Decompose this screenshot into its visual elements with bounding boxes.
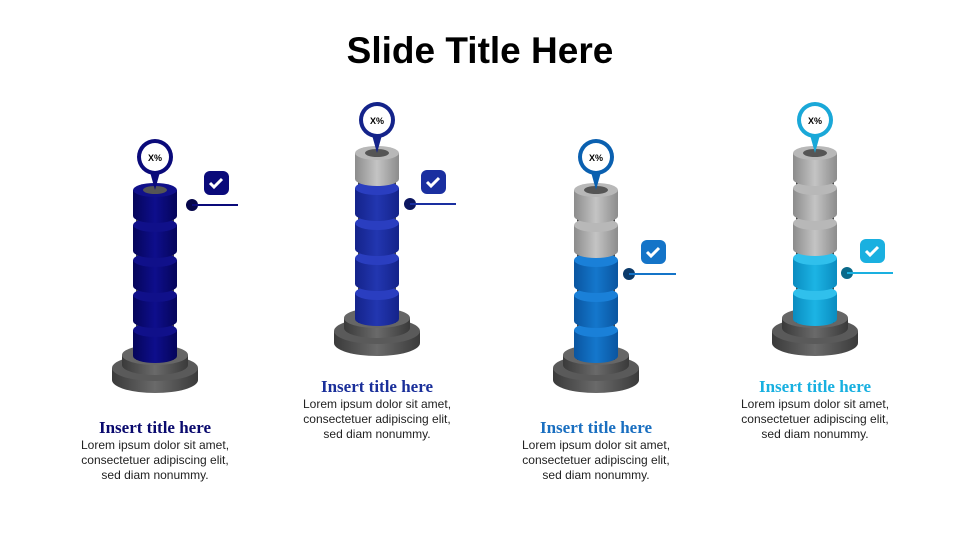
text block 3 bbox=[522, 418, 670, 482]
text block 1: Lorem ipsum dolor sit amet, bbox=[81, 438, 229, 452]
text block 3: consectetuer adipiscing elit, bbox=[522, 453, 670, 467]
text block 2: Lorem ipsum dolor sit amet, bbox=[303, 397, 451, 411]
text block 1: consectetuer adipiscing elit, bbox=[81, 453, 229, 467]
text block 3: Insert title here bbox=[540, 418, 652, 437]
check callout 1 bbox=[186, 171, 238, 211]
text block 1: Insert title here bbox=[99, 418, 211, 437]
text block 2 bbox=[303, 377, 451, 441]
text block 4: sed diam nonummy. bbox=[761, 427, 869, 441]
check callout 4 bbox=[841, 239, 893, 279]
tower 2 bbox=[334, 102, 420, 356]
pin 4 bbox=[797, 102, 833, 153]
check callout 3 bbox=[623, 240, 676, 280]
pin 2: X% bbox=[370, 116, 384, 126]
pin 1 bbox=[137, 139, 173, 190]
text block 4: consectetuer adipiscing elit, bbox=[741, 412, 889, 426]
title: Slide Title Here bbox=[347, 30, 613, 71]
pin 4: X% bbox=[808, 116, 822, 126]
text block 2: sed diam nonummy. bbox=[323, 427, 431, 441]
pin 1: X% bbox=[148, 153, 162, 163]
pin 3: X% bbox=[589, 153, 603, 163]
text block 3: Lorem ipsum dolor sit amet, bbox=[522, 438, 670, 452]
text block 4: Lorem ipsum dolor sit amet, bbox=[741, 397, 889, 411]
text block 2: consectetuer adipiscing elit, bbox=[303, 412, 451, 426]
tower 4 bbox=[772, 102, 858, 356]
text block 4 bbox=[741, 377, 889, 441]
pin 3 bbox=[578, 139, 614, 190]
text block 1: sed diam nonummy. bbox=[101, 468, 209, 482]
pin 2 bbox=[359, 102, 395, 153]
text block 2: Insert title here bbox=[321, 377, 433, 396]
tower 1 bbox=[112, 139, 198, 393]
check callout 2 bbox=[404, 170, 456, 210]
text block 1 bbox=[81, 418, 229, 482]
text block 3: sed diam nonummy. bbox=[542, 468, 650, 482]
tower 3 bbox=[553, 139, 639, 393]
text block 4: Insert title here bbox=[759, 377, 871, 396]
